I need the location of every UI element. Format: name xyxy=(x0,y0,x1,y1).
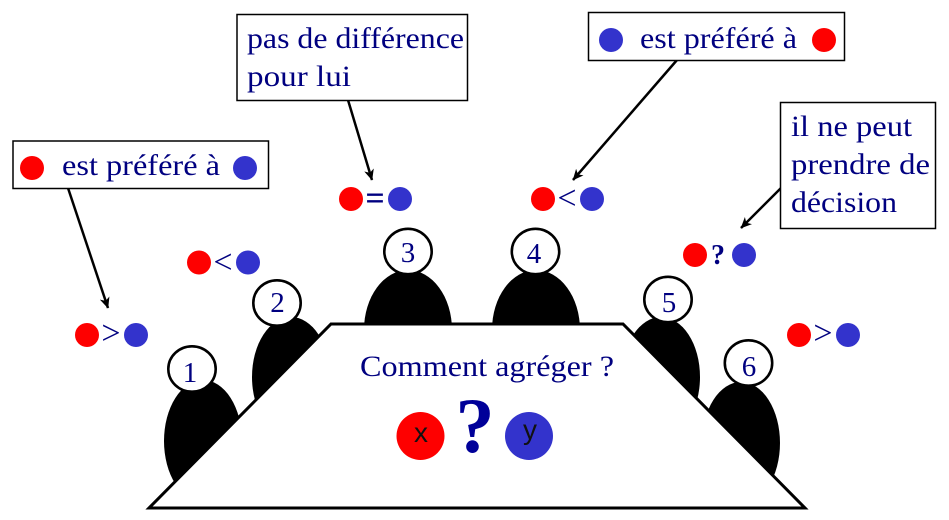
preference person 6 xyxy=(787,315,860,352)
table xyxy=(149,324,805,508)
callout 5 xyxy=(780,102,936,228)
preference person 2: < xyxy=(213,244,233,281)
person 1: 1 xyxy=(183,357,197,389)
person 2 xyxy=(252,280,330,437)
callout 1: est préféré à xyxy=(62,149,220,182)
callout 3: pour lui xyxy=(247,60,351,93)
preference person 1 xyxy=(75,315,148,352)
arrow: callout 5 xyxy=(741,188,781,228)
option y: y xyxy=(523,414,537,445)
person 1 xyxy=(164,346,242,502)
table heading: Comment agréger ? xyxy=(360,350,614,383)
person 5: 5 xyxy=(662,287,676,319)
preference person 5: ? xyxy=(711,240,725,271)
callout 3: pas de différence xyxy=(247,22,464,55)
callout 3 xyxy=(237,14,468,100)
callout 5: décision xyxy=(791,186,897,219)
callout 5: prendre de xyxy=(791,148,930,181)
preference person 2 xyxy=(187,244,260,281)
callout 4 xyxy=(588,12,844,60)
arrow: callout 3 xyxy=(348,100,372,180)
arrow: callout 4 xyxy=(573,60,677,180)
callout 1 xyxy=(13,141,268,188)
person 6: 6 xyxy=(742,351,756,383)
preference person 4 xyxy=(531,180,604,217)
preference person 5 xyxy=(683,240,756,271)
callout 4: est préféré à xyxy=(640,22,797,55)
person 2: 2 xyxy=(270,287,285,319)
preference person 1: > xyxy=(101,315,121,352)
big question mark: ? xyxy=(456,382,494,469)
option x: x xyxy=(414,417,428,448)
preference person 3 xyxy=(339,180,412,217)
person 3: 3 xyxy=(401,237,415,269)
preference person 6: > xyxy=(813,315,833,352)
person 5 xyxy=(622,277,700,437)
person 3 xyxy=(364,229,452,390)
person 6 xyxy=(702,340,780,504)
arrow: callout 1 xyxy=(68,188,108,308)
callout 5: il ne peut xyxy=(791,110,913,143)
option y xyxy=(505,412,553,460)
option x xyxy=(396,412,444,460)
person 4 xyxy=(492,229,580,390)
preference person 4: < xyxy=(557,180,577,217)
preference person 3: = xyxy=(365,180,385,217)
person 4: 4 xyxy=(527,238,542,270)
